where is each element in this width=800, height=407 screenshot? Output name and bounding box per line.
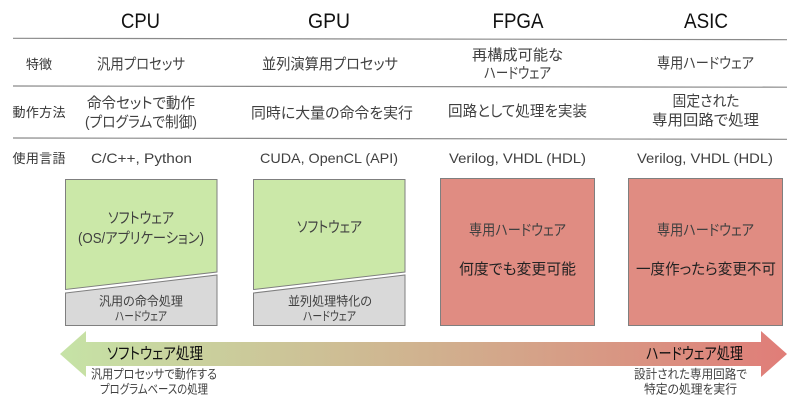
CPU feature: 汎用プロセッサ — [97, 56, 185, 73]
panel: ASIC block — [628, 178, 782, 326]
panel: FPGA block — [440, 178, 594, 326]
CPU operation — [85, 95, 197, 131]
software block — [254, 180, 405, 290]
row label: 特徴 — [26, 57, 52, 72]
ASIC languages: Verilog, VHDL (HDL) — [637, 150, 773, 166]
CPU operation: 命令セットで動作 — [87, 95, 195, 112]
FPGA languages: Verilog, VHDL (HDL) — [449, 150, 586, 166]
hardware label: 専用ハードウェア — [469, 222, 566, 239]
hardware processing description: 特定の処理を実行 — [644, 382, 737, 396]
arrow: software to hardware spectrum — [60, 331, 787, 377]
software label — [78, 210, 204, 247]
label: hardware processing — [634, 345, 747, 396]
label: software processing — [91, 345, 217, 396]
fixed note: 一度作ったら変更不可 — [636, 261, 776, 278]
label: hardware processing: ハードウェア処理 — [646, 345, 743, 363]
table row: 特徴 — [26, 47, 754, 82]
GPU feature: 並列演算用プロセッサ — [262, 55, 398, 73]
ASIC operation — [652, 93, 759, 129]
heading: GPU: GPU — [308, 10, 350, 33]
ASIC operation: 固定された — [672, 93, 740, 110]
hardware processing description — [634, 366, 747, 396]
hardware label — [99, 294, 183, 324]
CPU languages: C/C++, Python — [91, 150, 192, 166]
row label: 使用言語 — [12, 151, 66, 166]
label: software processing: ソフトウェア処理 — [107, 345, 203, 363]
software processing description: プログラムベースの処理 — [100, 382, 208, 396]
heading: ASIC: ASIC — [684, 10, 728, 33]
software processing description: 汎用プロセッサで動作する — [91, 368, 217, 382]
panel: GPU stack — [254, 180, 405, 326]
hardware label: 並列処理特化の — [288, 294, 372, 308]
software processing description — [91, 368, 217, 396]
heading: CPU: CPU — [121, 10, 160, 33]
hardware block — [628, 178, 782, 326]
FPGA operation: 回路として処理を実装 — [448, 103, 587, 120]
hardware label: 専用ハードウェア — [657, 222, 754, 239]
heading: FPGA: FPGA — [492, 10, 544, 33]
hardware block — [254, 275, 405, 326]
FPGA feature — [472, 47, 563, 82]
hardware label: 汎用の命令処理 — [99, 294, 183, 308]
CPU operation: (プログラムで制御) — [85, 114, 197, 131]
table row: 使用言語 — [12, 150, 773, 166]
hardware block — [66, 275, 217, 326]
ASIC operation: 専用回路で処理 — [652, 112, 759, 129]
GPU operation: 同時に大量の命令を実行 — [251, 105, 413, 122]
table row: 動作方法 — [12, 93, 759, 131]
hardware block — [440, 178, 594, 326]
software block — [66, 180, 217, 290]
hardware label — [288, 294, 372, 324]
row label: 動作方法 — [12, 105, 66, 120]
reconfigurable note: 何度でも変更可能 — [459, 261, 576, 278]
software label: ソフトウェア — [108, 210, 174, 227]
software label: (OS/アプリケーション) — [78, 230, 204, 247]
hardware label: ハードウェア — [303, 310, 356, 324]
software label: ソフトウェア — [297, 219, 362, 236]
hardware processing description: 設計された専用回路で — [634, 366, 747, 382]
FPGA feature: ハードウェア — [484, 65, 551, 82]
GPU languages: CUDA, OpenCL (API) — [260, 150, 398, 166]
ASIC feature: 専用ハードウェア — [657, 55, 754, 72]
hardware label: ハードウェア — [115, 310, 167, 324]
FPGA feature: 再構成可能な — [472, 47, 563, 64]
panel: CPU stack — [66, 180, 217, 326]
table header: processor names — [121, 10, 728, 33]
